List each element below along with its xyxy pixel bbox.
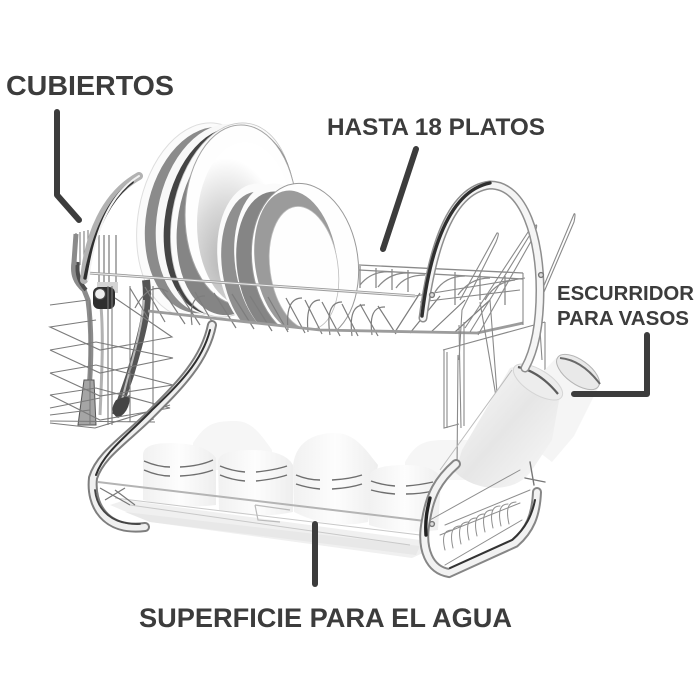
plate: small second — [234, 192, 276, 324]
bowl: back left — [193, 421, 272, 470]
bowl: first — [143, 443, 216, 507]
upper rack back rail — [359, 265, 523, 305]
tube: upper right arch — [422, 183, 540, 368]
panel: chrome frame left — [84, 176, 212, 528]
tube: lower left S curve — [93, 325, 212, 528]
bowl: fourth — [369, 465, 441, 532]
heading: SUPERFICIE PARA EL AGUA: SUPERFICIE PARA EL AGUA — [139, 603, 512, 633]
plate: small front — [251, 182, 360, 329]
arrow: platos pointer — [383, 149, 416, 249]
glass: front — [440, 357, 568, 488]
icon: fork and spoon handles — [73, 230, 147, 425]
panel: hanging glass holder wires — [444, 214, 575, 472]
upper rack dividers — [130, 287, 490, 336]
panel: drinking glasses — [440, 348, 605, 488]
glass: rear — [510, 348, 605, 462]
plate: large middle — [156, 124, 226, 314]
heading: ESCURRIDOR PARA VASOS — [557, 283, 694, 330]
bowl: third — [293, 433, 378, 524]
lower right dish rack — [430, 470, 530, 565]
bowl: second — [218, 450, 293, 516]
panel: bowls — [143, 421, 470, 532]
heading: ESCURRIDOR PARA VASOS: ESCURRIDOR — [557, 283, 694, 305]
tube: upper left arc — [84, 176, 139, 280]
panel: chrome frame right — [422, 183, 545, 573]
icon: stacked plates — [136, 122, 360, 329]
heading: CUBIERTOS: CUBIERTOS — [6, 70, 174, 101]
upper rack side wires — [415, 273, 545, 350]
panel: lower rack wires — [98, 482, 425, 545]
arrow: agua pointer — [312, 524, 318, 584]
heading: HASTA 18 PLATOS: HASTA 18 PLATOS — [327, 114, 545, 141]
panel: utensil basket with cutlery — [50, 230, 173, 428]
upper rack rails — [88, 273, 523, 333]
basket wires — [50, 286, 173, 428]
tube: lower right loop — [424, 464, 537, 573]
plate: large second — [170, 122, 292, 318]
panel: lower tray — [110, 500, 425, 558]
icon: basket clip — [93, 287, 115, 309]
plate: large back left — [136, 122, 222, 316]
arrow: cubiertos pointer — [57, 112, 79, 220]
panel: upper rack — [88, 265, 545, 350]
plate: small back — [217, 184, 256, 322]
plate: large front — [185, 125, 297, 306]
arrow: vasos pointer — [574, 335, 647, 394]
bowl: back right — [405, 440, 470, 480]
wing-nut fixtures — [430, 273, 545, 526]
heading: ESCURRIDOR PARA VASOS: PARA VASOS — [557, 308, 689, 330]
